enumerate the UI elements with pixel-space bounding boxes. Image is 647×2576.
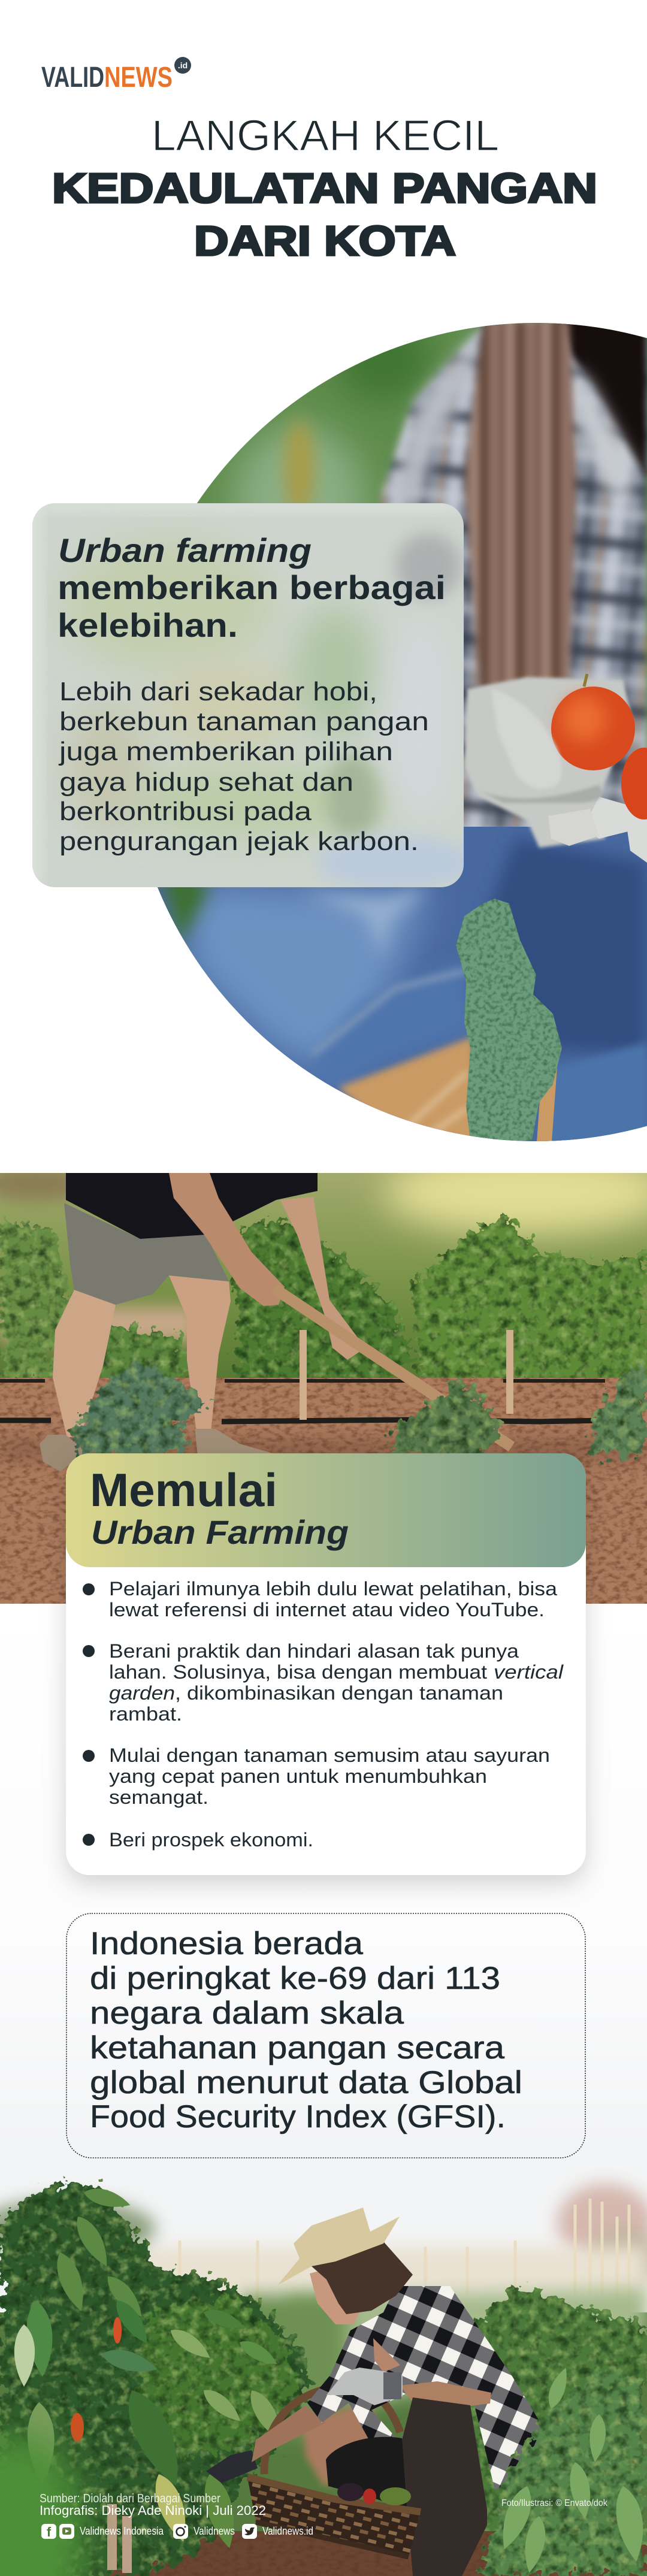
bullet list: [83, 1578, 564, 1851]
plaid shirt: [307, 2286, 561, 2490]
man: [40, 1173, 365, 1471]
background gradient: [0, 1604, 647, 2203]
title: LANGKAH KECIL: [152, 112, 499, 160]
blurred foreground leaf: [0, 2432, 87, 2576]
trousers: [402, 2397, 487, 2576]
panel: frosted intro card: [24, 497, 473, 890]
bullet 1: Pelajari ilmunya lebih dulu lewat pelatihan, bisa: [109, 1578, 557, 1600]
woman: [206, 2208, 561, 2576]
bullet 3: Mulai dengan tanaman semusim atau sayuran: [109, 1744, 550, 1766]
jeans: [120, 827, 647, 1150]
eggplant plants: [72, 1360, 647, 1456]
panel body text: juga memberikan pilihan: [58, 737, 393, 766]
bullet 3: semangat.: [109, 1786, 208, 1808]
braided hair: [464, 321, 576, 701]
callout: food security fact: global menurut data Global: [90, 2065, 522, 2100]
icon: instagram: [173, 2524, 188, 2539]
basket handle: [264, 2385, 400, 2474]
bullet 3: [83, 1744, 550, 1808]
panel body text: berkebun tanaman pangan: [59, 707, 429, 736]
hair: [312, 2238, 413, 2314]
bullet 3: yang cepat panen untuk menumbuhkan: [109, 1765, 487, 1787]
icon: twitter: [242, 2524, 257, 2539]
callout: food security fact: Food Security Index (GFSI).: [90, 2099, 506, 2134]
right chili plant: [479, 2366, 647, 2576]
footer credits: [40, 2492, 608, 2539]
callout: food security fact: Indonesia berada: [90, 1926, 364, 1961]
photo: farmer holding tomatoes in a circle: [158, 323, 647, 1141]
black top: [557, 318, 647, 479]
logo: [41, 57, 191, 93]
card header: [66, 1453, 586, 1567]
forearm: [252, 2405, 326, 2462]
title: DARI KOTA: [194, 217, 456, 264]
panel body text: [58, 677, 429, 856]
panel heading: memberikan berbagai: [58, 569, 446, 606]
bullet 2: rambat.: [109, 1703, 182, 1725]
source line: Sumber: Diolah dari Berbagai Sumber: [40, 2492, 220, 2505]
path soil: [303, 2402, 383, 2486]
dark glove hand: [206, 2450, 258, 2483]
left pepper plant: [0, 2181, 312, 2576]
bullet 2: garden: [109, 1682, 175, 1704]
bullet 2: lahan. Solusinya, bisa dengan membuat: [109, 1661, 487, 1683]
glove and tomatoes: [464, 674, 647, 863]
shirt: plaid: [381, 323, 647, 851]
glove: [326, 2368, 403, 2405]
photo credit: Foto/Ilustrasi: © Envato/dok: [501, 2498, 608, 2508]
panel heading: [58, 531, 446, 644]
kale: [456, 899, 562, 1141]
soil: [0, 1378, 647, 1606]
panel body text: gaya hidup sehat dan: [59, 767, 353, 797]
bullet 2: , dikombinasikan dengan tanaman: [175, 1682, 503, 1704]
callout: food security fact: di peringkat ke-69 dari 113: [90, 1961, 500, 1996]
bullet 2: [83, 1640, 564, 1725]
icon: facebook: f: [47, 2524, 52, 2539]
icon: youtube: [59, 2524, 74, 2539]
panel: white steps card: [66, 1453, 586, 1875]
callout: food security fact: negara dalam skala: [90, 1996, 404, 2031]
bullet 1: lewat referensi di internet atau video YouTube.: [109, 1599, 545, 1620]
panel heading: kelebihan.: [58, 606, 238, 644]
bullet 2: vertical: [494, 1661, 564, 1683]
social label: Validnews Indonesia: Validnews Indonesia: [80, 2525, 164, 2537]
basket: [247, 2477, 421, 2557]
bullet 1: [83, 1578, 557, 1620]
straw hat: [277, 2208, 400, 2285]
panel heading: Urban farming: [58, 531, 312, 569]
social label: Validnews: Validnews: [194, 2525, 235, 2537]
card header: Memulai: [90, 1464, 277, 1516]
logo: .id: [178, 61, 188, 70]
foliage: [0, 1216, 647, 1384]
icon: facebook: [41, 2524, 56, 2539]
callout: food security fact: [66, 1913, 585, 2158]
photo: man hoeing a vegetable garden: [0, 1150, 647, 1606]
stakes: [303, 1330, 510, 1420]
chest and upper arm: [373, 2338, 400, 2372]
cardboard: [338, 1036, 479, 1150]
ground foliage: [0, 2312, 647, 2576]
bullet 2: Berani praktik dan hindari alasan tak punya: [109, 1640, 519, 1662]
card header: Urban Farming: [91, 1513, 349, 1551]
logo: NEWS: [104, 62, 173, 93]
hoe: [274, 1289, 512, 1447]
panel body text: Lebih dari sekadar hobi,: [59, 677, 377, 706]
fence: [0, 2199, 647, 2300]
social label: Validnews.id: Validnews.id: [262, 2525, 313, 2537]
title: [52, 112, 597, 264]
photo: woman harvesting peppers: [0, 2181, 647, 2576]
logo: VALID: [41, 62, 104, 93]
panel body text: berkontribusi pada: [59, 797, 312, 826]
bullet 4: Beri prospek ekonomi.: [109, 1829, 313, 1851]
author line: Infografis: Dieky Ade Ninoki | Juli 2022: [40, 2503, 266, 2518]
title: KEDAULATAN PANGAN: [52, 165, 597, 211]
callout: food security fact: ketahanan pangan secara: [90, 2030, 505, 2066]
panel body text: pengurangan jejak karbon.: [59, 827, 419, 856]
face: [310, 2264, 359, 2324]
